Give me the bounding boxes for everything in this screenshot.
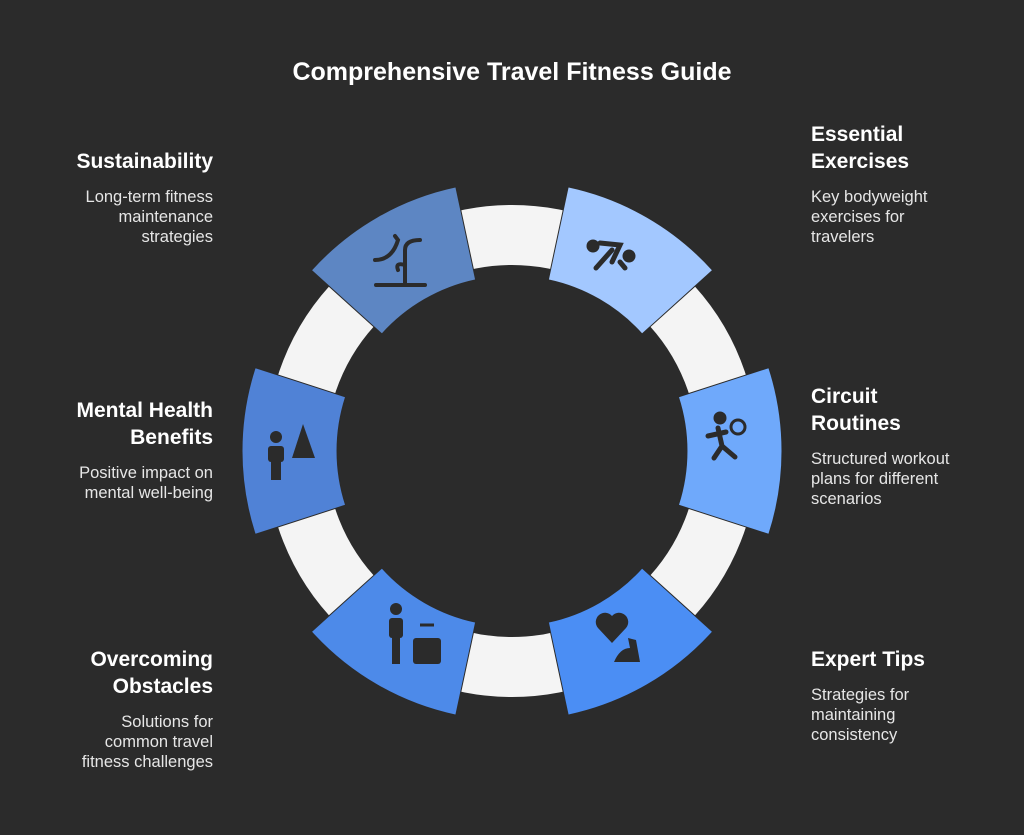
white ring <box>296 235 728 667</box>
icon: runner with stopwatch <box>708 412 745 458</box>
icon: exercise figure <box>587 240 635 268</box>
icon: heart and arm <box>596 613 640 662</box>
icon: growth plant <box>375 236 425 285</box>
text: mental health <box>76 399 213 502</box>
title: Comprehensive Travel Fitness Guide <box>292 58 732 86</box>
text: essential exercises <box>811 123 928 246</box>
text: essential exercises: exercises for <box>811 208 905 226</box>
icon: person and luggage <box>389 603 441 664</box>
segment: circuit routines <box>678 368 782 534</box>
segment: sustainability <box>305 175 501 349</box>
text: essential exercises: Exercises <box>811 150 909 173</box>
text: overcoming obstacles: common travel <box>105 733 213 751</box>
text: sustainability <box>76 150 213 246</box>
text: circuit routines: plans for different <box>811 470 938 488</box>
text: overcoming obstacles: Overcoming <box>90 648 213 671</box>
text: expert tips: Expert Tips <box>811 648 925 671</box>
text: circuit routines: Structured workout <box>811 450 949 468</box>
segment: overcoming obstacles <box>305 553 501 727</box>
segment: mental health <box>242 368 346 534</box>
text: overcoming obstacles <box>82 648 213 771</box>
text: mental health: Benefits <box>130 426 213 449</box>
segment: expert tips <box>523 553 719 727</box>
text: overcoming obstacles: Obstacles <box>113 675 213 698</box>
text: expert tips: consistency <box>811 726 897 744</box>
text: circuit routines <box>811 385 950 508</box>
text: mental health: Mental Health <box>76 399 213 422</box>
text: expert tips: Strategies for <box>811 686 909 704</box>
text: sustainability: strategies <box>141 228 213 246</box>
text: sustainability: Sustainability <box>76 150 213 173</box>
text: sustainability: Long-term fitness <box>86 188 213 206</box>
text: essential exercises: Key bodyweight <box>811 188 928 206</box>
text: essential exercises: Essential <box>811 123 903 146</box>
text: expert tips: maintaining <box>811 706 895 724</box>
text: circuit routines: Circuit <box>811 385 878 408</box>
text: mental health: Positive impact on <box>79 464 213 482</box>
text: expert tips <box>811 648 925 744</box>
text: sustainability: maintenance <box>119 208 213 226</box>
text: circuit routines: scenarios <box>811 490 882 508</box>
text: overcoming obstacles: fitness challenges <box>82 753 213 771</box>
text: mental health: mental well-being <box>85 484 213 502</box>
text: circuit routines: Routines <box>811 412 901 435</box>
icon: person and mountain <box>268 424 315 480</box>
text: overcoming obstacles: Solutions for <box>121 713 213 731</box>
text: essential exercises: travelers <box>811 228 874 246</box>
segment: essential exercises <box>523 175 719 349</box>
